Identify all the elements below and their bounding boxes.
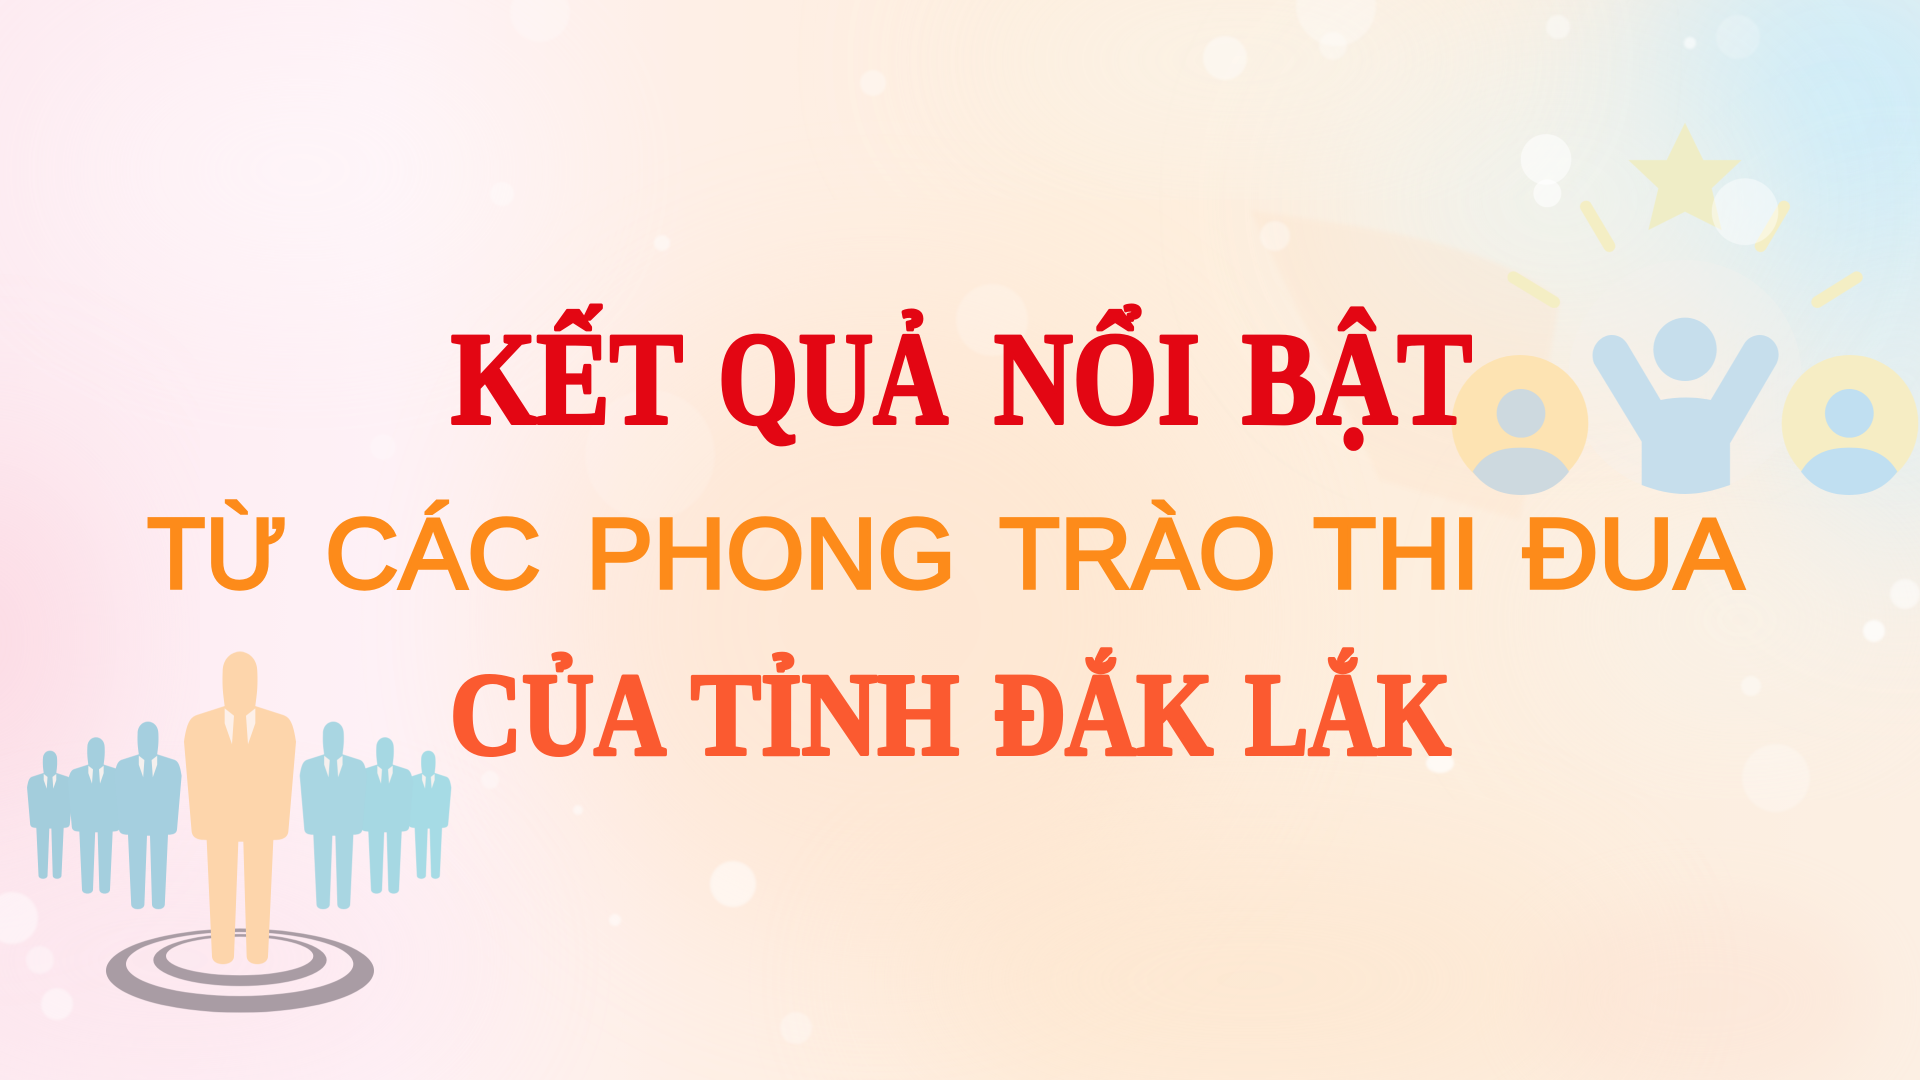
- title line 1: QUẢ: [718, 305, 948, 452]
- title line 3: TỈNH: [691, 649, 959, 780]
- icon group: team celebrating with star: [1452, 123, 1918, 495]
- title line 2: ĐUA: [1523, 498, 1744, 610]
- title line 1: [451, 305, 1472, 452]
- title line 3: LẮK: [1245, 648, 1451, 780]
- icon: central person raising arms: [1593, 318, 1779, 494]
- title line 2: TỪ: [147, 498, 287, 610]
- person: near right: [300, 722, 367, 909]
- person: far left: [27, 751, 73, 879]
- icon: star: [1628, 123, 1742, 230]
- title line 2: TRÀO: [999, 498, 1276, 610]
- inner ring: [153, 934, 327, 986]
- person: far right: [405, 751, 451, 879]
- title line 3: ĐẮK: [994, 648, 1213, 780]
- title line 2: THI: [1313, 498, 1480, 610]
- illustration: leader standing among team: [27, 652, 451, 1013]
- title line 2: PHONG: [586, 498, 956, 610]
- target rings: [106, 929, 374, 1013]
- title line 1: NỔI: [994, 305, 1200, 452]
- title line 2: CÁC: [325, 498, 541, 610]
- icon: left person: [1452, 355, 1588, 495]
- icon: white lights over star: [1521, 134, 1778, 245]
- faint halo: [1568, 260, 1802, 493]
- person: middle left: [68, 737, 124, 894]
- person: middle right: [357, 737, 413, 894]
- person: central leader: [184, 652, 296, 964]
- title line 3: [450, 648, 1451, 780]
- icon: right person: [1782, 355, 1918, 495]
- title line 1: BẬT: [1242, 305, 1472, 452]
- title line 2: [147, 498, 1744, 610]
- icon: light rays: [1513, 207, 1857, 302]
- title line 3: CỦA: [450, 649, 666, 780]
- title line 1: KẾT: [451, 305, 683, 452]
- person: near left: [114, 722, 182, 909]
- decorative peach blob: [1250, 210, 1560, 520]
